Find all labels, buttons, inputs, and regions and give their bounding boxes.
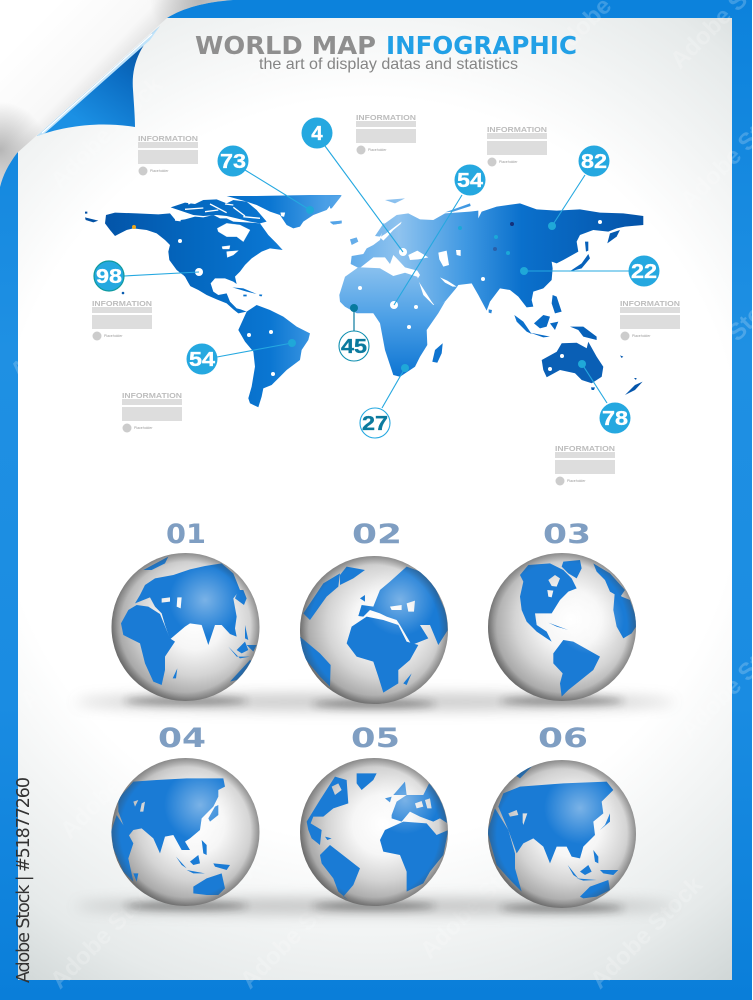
callout: 54 Africa <box>394 164 486 305</box>
watermark text: Adobe Stock <box>235 761 358 884</box>
page curl at the top-left corner <box>0 0 233 187</box>
info block 3 <box>487 127 547 166</box>
title <box>195 31 577 60</box>
globe 02 <box>300 556 450 704</box>
watermark text: Adobe Stock <box>585 871 708 994</box>
info block 4: INFORMATION <box>92 301 152 308</box>
callout: 45 <box>339 304 369 361</box>
globe 04 <box>111 758 260 906</box>
watermark text: Adobe Stock <box>45 391 168 514</box>
watermark text: Adobe Stock <box>45 871 168 994</box>
watermark text: Adobe Stock <box>385 381 508 504</box>
info block 4: Placeholder <box>104 334 123 338</box>
watermark text: Adobe Stock <box>375 41 498 164</box>
callout: 73 <box>218 146 314 214</box>
callout: 54 South America: 54 <box>189 348 216 371</box>
info block 5 <box>122 393 182 432</box>
callout: 27: 27 <box>362 412 388 435</box>
globe shadows row 2 <box>75 898 675 914</box>
globe 06 <box>487 760 636 908</box>
info block 2 <box>356 115 416 154</box>
globe 03 <box>488 553 638 701</box>
callout: 98: 98 <box>96 265 122 288</box>
callout: 22: 22 <box>631 260 657 283</box>
watermark text: Adobe Stock <box>55 721 178 844</box>
info block 1: INFORMATION <box>138 136 198 143</box>
map location dots <box>122 220 602 376</box>
info block 5: INFORMATION <box>122 393 182 400</box>
callout: 27 <box>360 364 409 438</box>
callout: 54 South America <box>186 339 296 374</box>
callout: 4 <box>302 118 403 252</box>
world map <box>85 195 643 407</box>
info block 1 <box>138 136 198 176</box>
info block 6: Placeholder <box>632 334 651 338</box>
callout: 78: 78 <box>602 407 628 430</box>
map: Australia <box>542 342 603 383</box>
map: Eurasia <box>330 196 643 395</box>
info block 5: Placeholder <box>134 426 153 430</box>
callout: 45: 45 <box>341 335 367 358</box>
callout: 78 <box>578 360 630 434</box>
map: white water shapes in Eurasia <box>373 222 461 287</box>
callout: 98 <box>94 261 199 291</box>
label 06: 06 <box>538 723 588 754</box>
info block 3: INFORMATION <box>487 127 547 134</box>
label 04: 04 <box>158 723 206 754</box>
info block 1: Placeholder <box>150 169 169 173</box>
info block 7: Placeholder <box>567 479 586 483</box>
callout: 22 <box>520 256 660 286</box>
map: Africa <box>339 267 445 377</box>
map: Madagascar <box>432 343 443 363</box>
info block 6 <box>620 301 680 340</box>
watermark text: Adobe Stock <box>415 841 538 964</box>
callout: 82 <box>548 146 610 230</box>
watermark text: Adobe Stock <box>45 71 168 194</box>
watermark text: Adobe Stock <box>15 591 138 714</box>
callout: 82: 82 <box>581 150 607 173</box>
label 03: 03 <box>543 519 591 550</box>
info block 6: INFORMATION <box>620 301 680 308</box>
info block 7 <box>555 446 615 486</box>
info block 4 <box>92 301 152 340</box>
info block 2: INFORMATION <box>356 115 416 122</box>
stock credit: Adobe Stock | #51877260 <box>14 777 34 983</box>
map: Americas <box>85 195 342 407</box>
info block 7: INFORMATION <box>555 446 615 453</box>
callout: 54 Africa: 54 <box>457 169 484 192</box>
title: WORLD MAP <box>195 31 376 60</box>
info block 3: Placeholder <box>499 160 518 164</box>
watermark text: Adobe Stock <box>235 871 358 994</box>
label 02: 02 <box>352 519 402 550</box>
callout: 73: 73 <box>220 150 246 173</box>
subtitle: the art of display datas and statistics <box>259 56 518 73</box>
globe 05 <box>300 758 450 906</box>
watermark text: Adobe Stock <box>5 261 128 384</box>
info block 2: Placeholder <box>368 148 387 152</box>
globe shadows row 1 <box>75 694 675 710</box>
map: white water shapes in the Americas <box>175 201 285 287</box>
label 05: 05 <box>351 723 400 754</box>
label 01: 01 <box>166 519 206 550</box>
watermark text: Adobe Stock <box>185 31 308 154</box>
title: INFOGRAPHIC <box>386 31 577 60</box>
globe 01 <box>112 553 260 701</box>
callout: 4: 4 <box>311 122 323 145</box>
